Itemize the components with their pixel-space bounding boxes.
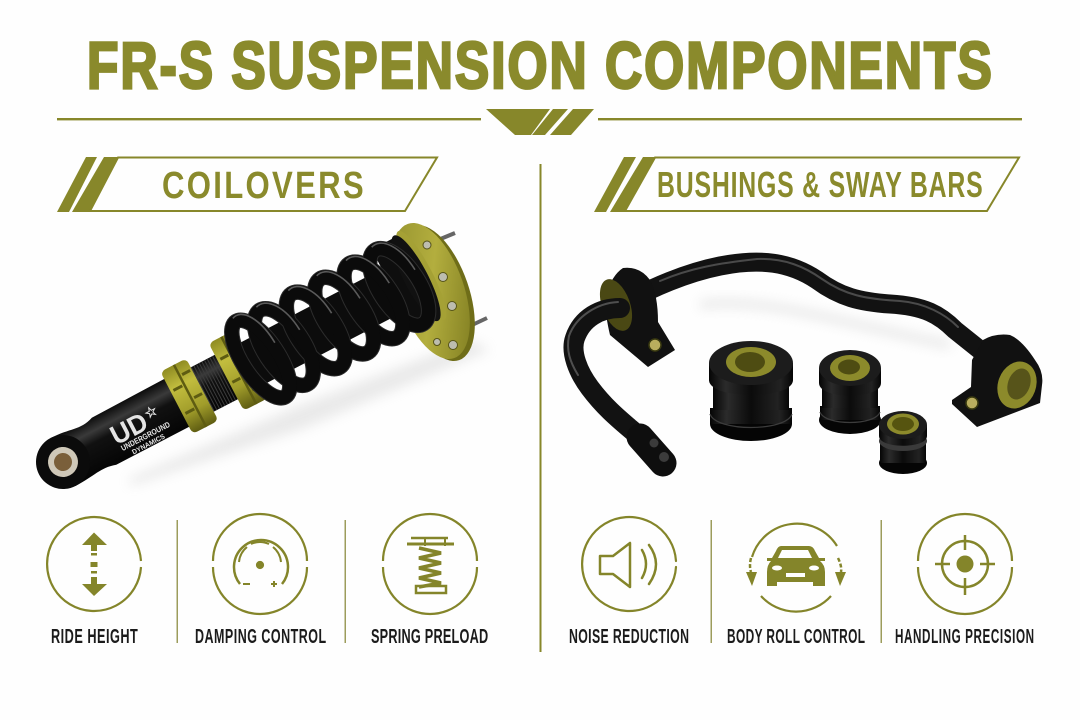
left bracket	[606, 268, 675, 367]
icon: damping gauge	[213, 514, 307, 614]
icon: handling precision	[918, 514, 1012, 614]
sway bar	[617, 259, 990, 358]
labels: HANDLING PRECISION	[895, 625, 1034, 648]
small bushing	[879, 411, 927, 474]
title divider with chevron	[57, 109, 1022, 135]
brand logo: UD	[105, 407, 153, 451]
feature dividers	[176, 520, 882, 643]
labels: DAMPING CONTROL	[195, 625, 326, 648]
sway bar and bushings illustration	[568, 259, 1043, 474]
brand logo: UNDERGROUND	[120, 420, 172, 453]
medium bushing	[819, 350, 881, 434]
labels: NOISE REDUCTION	[569, 625, 689, 648]
labels: BODY ROLL CONTROL	[727, 625, 865, 648]
labels: SPRING PRELOAD	[371, 625, 488, 648]
coilover illustration	[16, 213, 490, 519]
icon: body roll control	[746, 524, 846, 612]
labels	[51, 625, 1034, 648]
spring coils	[218, 231, 442, 411]
icon: noise reduction	[582, 517, 676, 611]
section header: bushings and sway bars	[594, 157, 1019, 212]
icon: ride height	[47, 517, 141, 611]
title: FR-S SUSPENSION COMPONENTS	[87, 28, 992, 102]
brand logo: DYNAMICS	[131, 433, 167, 456]
section header: coilovers	[57, 157, 437, 212]
labels: RIDE HEIGHT	[51, 625, 138, 648]
section header: bushings and sway bars: BUSHINGS & SWAY BARS	[657, 164, 983, 205]
right bracket	[952, 335, 1042, 427]
brand logo	[105, 398, 175, 461]
brand logo: ☆	[141, 402, 160, 422]
icon: spring preload	[383, 514, 477, 614]
large bushing	[709, 341, 793, 441]
center divider	[540, 164, 542, 652]
section header: coilovers: COILOVERS	[162, 165, 364, 207]
